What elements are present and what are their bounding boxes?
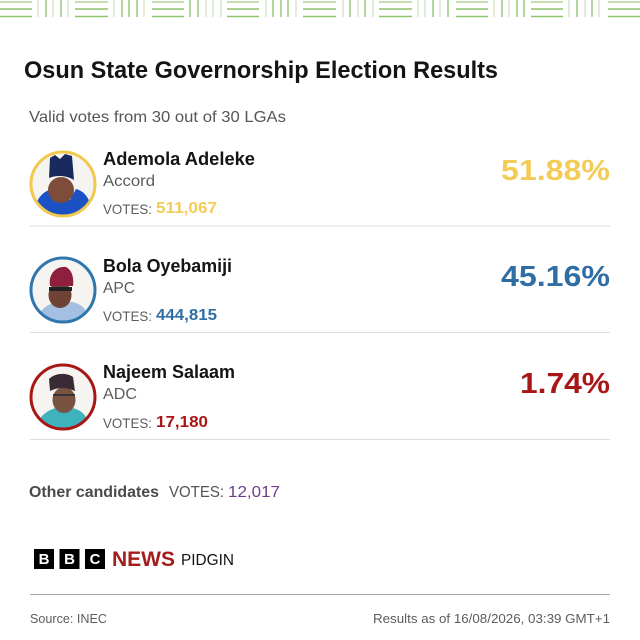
- logo: BBC News Pidgin: C: [90, 551, 101, 568]
- source: Source: INEC: [30, 611, 107, 626]
- other candidates: Other candidates: [29, 484, 159, 501]
- panel: Bola Oyebamiji: [31, 256, 610, 324]
- other candidates: VOTES:: [169, 484, 224, 501]
- percentage: 1.74%: [520, 368, 610, 400]
- other candidates: 12,017: [228, 484, 280, 501]
- icon: portrait of Ademola Adeleke: [31, 152, 95, 216]
- icon: portrait of Najeem Salaam: [31, 365, 95, 429]
- panel: Najeem Salaam: 17,180: [156, 414, 208, 431]
- votes: VOTES:: [103, 201, 152, 217]
- party: APC: [103, 280, 135, 297]
- party: ADC: [103, 386, 137, 403]
- candidate name: Najeem Salaam: [103, 362, 235, 382]
- timestamp: Results as of 16/08/2026, 03:39 GMT+1: [373, 611, 610, 626]
- votes: VOTES:: [103, 308, 152, 324]
- title: Osun State Governorship Election Results: [24, 57, 498, 84]
- panel: Ademola Adeleke: [31, 149, 610, 217]
- logo: BBC News Pidgin: B: [64, 551, 75, 568]
- other candidates: [29, 484, 280, 501]
- party: Accord: [103, 173, 155, 190]
- panel: Bola Oyebamiji: 444,815: [156, 307, 217, 324]
- percentage: 45.16%: [501, 261, 610, 293]
- votes: VOTES:: [103, 415, 152, 431]
- icon: portrait of Bola Oyebamiji: [31, 258, 95, 322]
- percentage: 51.88%: [501, 155, 610, 187]
- panel: Ademola Adeleke: 511,067: [156, 200, 217, 217]
- candidate name: Ademola Adeleke: [103, 149, 255, 169]
- logo: BBC News Pidgin: NEWS: [112, 548, 175, 571]
- subtitle: valid votes: Valid votes from 30 out of 30 LGAs: [29, 109, 286, 126]
- panel: Najeem Salaam: [31, 362, 610, 431]
- logo: BBC News Pidgin: [34, 548, 234, 571]
- logo: BBC News Pidgin: B: [39, 551, 50, 568]
- candidate name: Bola Oyebamiji: [103, 256, 232, 276]
- logo: BBC News Pidgin: PIDGIN: [181, 552, 234, 569]
